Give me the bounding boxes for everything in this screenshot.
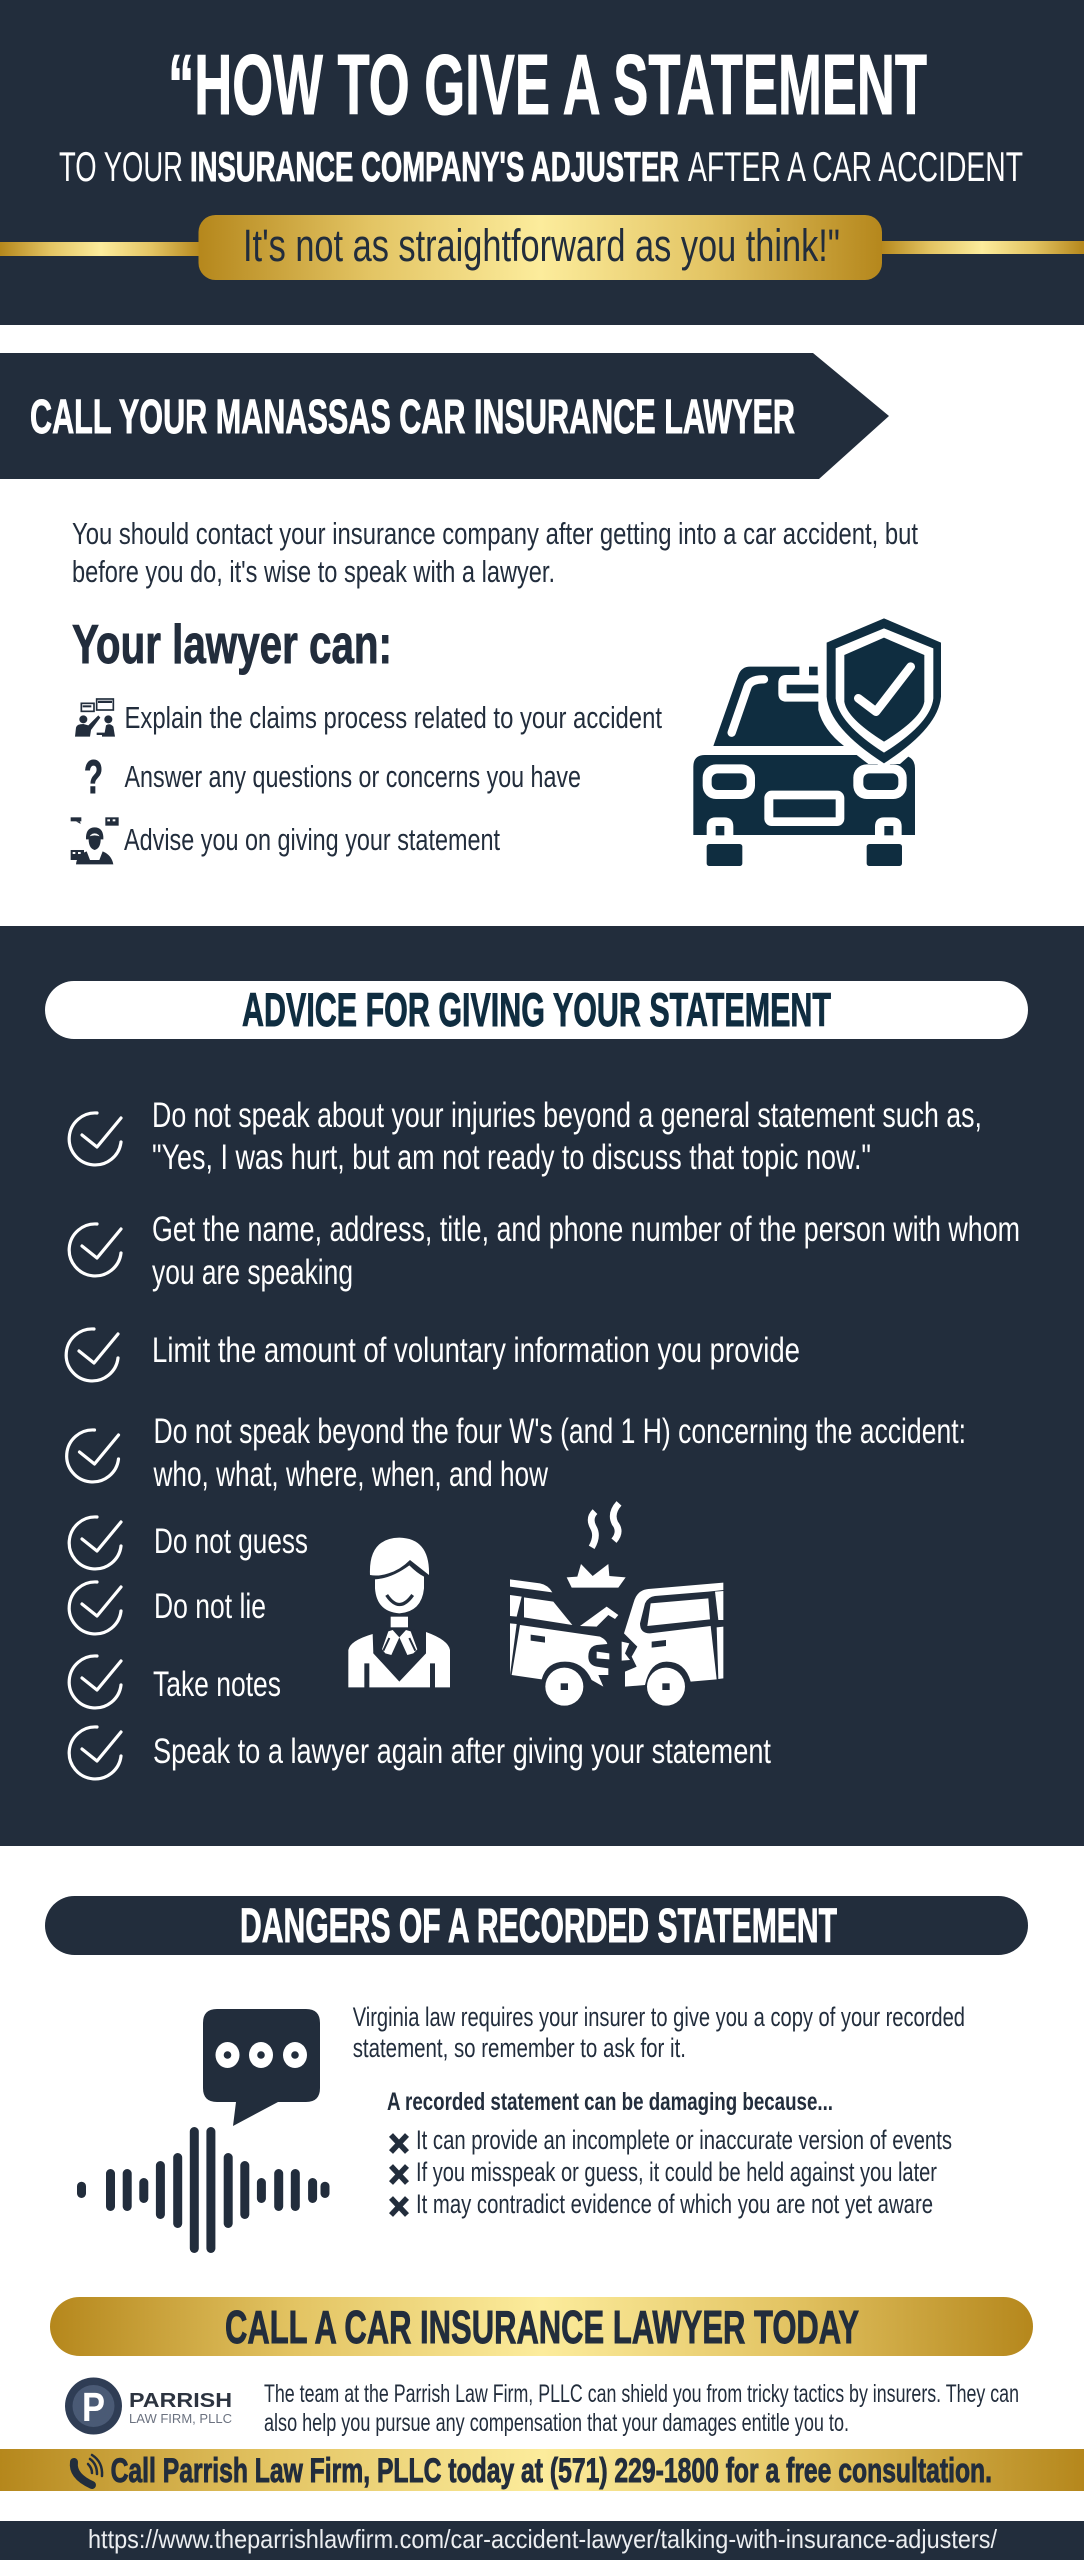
advice item 1: "Yes, I was hurt, but am not ready to discuss that topic now." <box>152 1138 871 1177</box>
advice item 5: Do not guess <box>154 1522 308 1561</box>
intro paragraph: before you do, it's wise to speak with a lawyer. <box>72 554 555 589</box>
danger item 3: It may contradict evidence of which you are not yet aware <box>416 2189 933 2219</box>
icon: sound waveform <box>77 2127 330 2253</box>
check icon 3 <box>66 1329 118 1381</box>
damaging subheading: A recorded statement can be damaging because... <box>387 2088 833 2116</box>
icon: car with shield <box>693 615 944 866</box>
logo: Parrish Law Firm <box>65 2378 232 2434</box>
subheading: Your lawyer can: <box>72 613 392 675</box>
intro paragraph <box>72 516 918 589</box>
check icon 4 <box>67 1430 118 1482</box>
list item: explain: Explain the claims process related to your accident <box>124 700 662 735</box>
icon: question mark: ? <box>84 750 103 803</box>
icon: speech bubble <box>203 2009 320 2126</box>
logo: Parrish Law Firm: PARRISH <box>129 2390 232 2412</box>
panel: call to action <box>0 2297 1084 2491</box>
arrow heading <box>0 353 889 479</box>
advice item 2 <box>152 1210 1020 1292</box>
gold phone band <box>0 2449 1084 2491</box>
gold banner with tagline: It's not as straightforward as you think!" <box>243 220 840 271</box>
icon: two people explaining <box>75 699 115 737</box>
gold ribbon bars <box>0 241 1084 256</box>
icon: two cars crash <box>510 1503 723 1706</box>
subtitle: TO YOUR <box>59 143 183 190</box>
dangers heading pill <box>45 1896 1028 1955</box>
icon: adviser with speech bubbles <box>71 817 119 864</box>
check icon 5 <box>69 1517 121 1569</box>
gold banner with tagline <box>198 215 882 280</box>
gold heading pill <box>50 2297 1033 2356</box>
advice item 4 <box>153 1412 966 1494</box>
advice item 7: Take notes <box>153 1665 281 1704</box>
panel: dangers of a recorded statement <box>45 1896 1028 2253</box>
recorded statement paragraph <box>353 2002 965 2063</box>
logo: Parrish Law Firm: LAW FIRM, PLLC <box>129 2411 232 2426</box>
subtitle: INSURANCE COMPANY'S ADJUSTER <box>190 143 679 190</box>
firm description: also help you pursue any compensation that your damages entitle you to. <box>264 2409 849 2437</box>
check icon 1 <box>69 1113 121 1165</box>
advice heading pill <box>45 981 1028 1039</box>
advice item 8: Speak to a lawyer again after giving your statement <box>153 1732 771 1771</box>
panel: header <box>0 0 1084 325</box>
advice item 6: Do not lie <box>154 1587 266 1626</box>
recorded statement paragraph: statement, so remember to ask for it. <box>353 2033 686 2063</box>
check icon 6 <box>69 1582 121 1634</box>
firm description <box>264 2380 1019 2437</box>
footer URL bar: https://www.theparrishlawfirm.com/car-accident-lawyer/talking-with-insurance-adjusters/ <box>88 2524 998 2554</box>
check icon 8 <box>69 1727 121 1779</box>
advice item 1 <box>152 1096 982 1177</box>
list item: answer: Answer any questions or concerns you have <box>124 759 581 794</box>
check icon 2 <box>69 1224 121 1276</box>
logo: Parrish Law Firm: P <box>82 2384 105 2430</box>
icon: phone <box>74 2455 102 2485</box>
icon: insurance adjuster person <box>348 1538 450 1687</box>
panel: call your lawyer <box>0 353 944 866</box>
check icon 7 <box>69 1656 121 1708</box>
list item: advise: Advise you on giving your statement <box>124 822 500 857</box>
advice item 2: you are speaking <box>152 1253 353 1292</box>
advice item 3: Limit the amount of voluntary information you provide <box>152 1331 800 1370</box>
panel: advice for giving your statement <box>0 926 1084 1846</box>
advice item 4: who, what, where, when, and how <box>153 1455 549 1494</box>
